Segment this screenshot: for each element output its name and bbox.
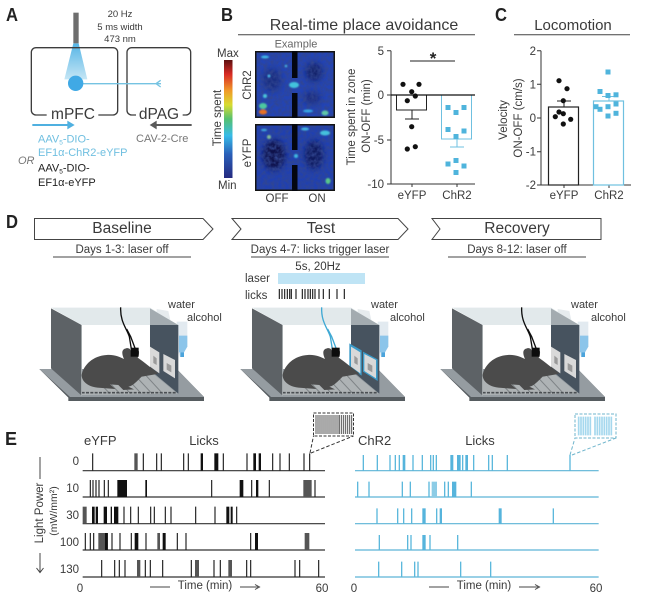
time axes: 0 (351, 583, 357, 595)
color scale: Time spent (212, 89, 224, 146)
raster headings: ChR2 (358, 433, 391, 448)
time axes: 60 (590, 583, 602, 595)
virus labels: 5 (59, 168, 63, 176)
bar chart: velocity: ChR2 (594, 190, 624, 202)
bar chart: time spent in zone: -5 (374, 135, 384, 147)
water and alcohol labels: alcohol (591, 312, 626, 324)
virus labels: -DIO- (63, 134, 90, 146)
panel letter D: D (6, 212, 18, 232)
light power axis: (mW/mm²) (48, 486, 60, 536)
light power axis (34, 456, 79, 576)
bar chart: velocity: -2 (526, 180, 536, 192)
bar chart: velocity: 1 (530, 80, 536, 92)
laser parameters: 473 nm (104, 34, 136, 45)
time axes (77, 580, 602, 595)
light power axis: 0 (73, 456, 79, 468)
region labels (51, 106, 179, 123)
raster: eYFP licks (83, 453, 325, 577)
virus labels: AAV (38, 134, 59, 146)
raster: ChR2 licks (355, 455, 599, 577)
bar chart: velocity: eYFP (550, 190, 579, 202)
light power axis: 100 (60, 537, 79, 549)
raster headings: Licks (465, 433, 495, 448)
inset: ChR2 lick zoom (570, 414, 616, 455)
water and alcohol labels (167, 299, 626, 324)
water and alcohol labels: alcohol (390, 312, 425, 324)
virus labels (18, 133, 188, 189)
light power axis: 30 (66, 510, 79, 522)
stage: test (232, 218, 408, 257)
heat map labels: OFF (266, 193, 288, 205)
bar chart: time spent in zone: ChR2 (442, 190, 472, 202)
heat map labels (242, 70, 326, 205)
panel D: behavioral protocol (6, 212, 626, 401)
stage: recovery (432, 218, 601, 257)
chamber: baseline (39, 307, 204, 401)
bar chart: time spent in zone: * (430, 49, 437, 68)
heat map: ChR2 (255, 51, 335, 118)
chamber: recovery (440, 307, 605, 401)
panel letter E: E (5, 429, 17, 449)
stage: baseline: Days 1-3: laser off (75, 244, 169, 256)
diagram: brain regions and optical fiber (31, 13, 192, 129)
raster headings: eYFP (84, 433, 117, 448)
bar chart: velocity: Velocity (498, 100, 510, 140)
inset: eYFP lick zoom (310, 413, 354, 453)
heat map: eYFP (255, 124, 335, 191)
laser parameters: 5 ms width (97, 22, 143, 33)
stage: recovery: Days 8-12: laser off (467, 244, 568, 256)
virus labels: AAV (38, 162, 59, 174)
panel B: real-time place avoidance (212, 5, 475, 205)
panel A: optogenetic circuit diagram (6, 5, 192, 189)
virus labels: OR (18, 155, 35, 167)
raster headings: Licks (189, 433, 219, 448)
stage: baseline: Baseline (92, 220, 152, 237)
bar chart: time spent in zone (346, 46, 475, 202)
laser and licks trace: laser (245, 273, 270, 285)
color scale (212, 48, 239, 192)
laser and licks trace (245, 261, 365, 302)
bar chart: velocity: ON-OFF (cm/s) (513, 78, 525, 158)
stage: recovery: Recovery (484, 220, 550, 237)
stage: test: Test (307, 220, 336, 237)
region labels: mPFC (51, 106, 95, 123)
laser and licks trace: licks (245, 290, 268, 302)
bar chart: time spent in zone: ON-OFF (min) (361, 79, 373, 153)
bar chart: velocity: 0 (530, 113, 536, 125)
stage: test: Days 4-7: licks trigger laser (251, 244, 390, 256)
bar chart: time spent in zone: Time spent in zone (346, 69, 358, 165)
bar chart: time spent in zone: eYFP (398, 190, 427, 202)
virus labels: 5 (59, 140, 63, 146)
heading B: Real-time place avoidance (270, 17, 458, 34)
raster headings (84, 433, 495, 448)
color scale: Max (217, 48, 239, 60)
bar chart: time spent in zone: -10 (367, 179, 384, 191)
example label: Example (275, 38, 317, 50)
bar chart: time spent in zone: 0 (378, 90, 384, 102)
water and alcohol labels: water (167, 299, 195, 311)
stage: baseline (34, 218, 213, 257)
heat map labels: ON (308, 193, 326, 205)
heading C: Locomotion (534, 17, 612, 34)
virus labels: EF1α-eYFP (38, 177, 96, 189)
water and alcohol labels: water (370, 299, 398, 311)
time axes: 60 (316, 583, 328, 595)
virus labels: -DIO- (63, 162, 90, 174)
laser and licks trace: 5s, 20Hz (295, 261, 341, 273)
time axes: Time (min) (178, 580, 232, 592)
water and alcohol labels: water (570, 299, 598, 311)
virus labels: EF1α-ChR2-eYFP (38, 147, 128, 159)
panel E: lick rasters (5, 413, 616, 595)
panel letter A: A (6, 5, 18, 25)
bar chart: velocity (498, 46, 631, 202)
light power axis: Light Power (34, 482, 46, 543)
laser parameters (97, 9, 143, 45)
panel letter C: C (495, 5, 507, 25)
water and alcohol labels: alcohol (187, 312, 222, 324)
light power axis: 130 (60, 564, 79, 576)
region labels: dPAG (139, 106, 179, 123)
time axes: Time (min) (457, 580, 511, 592)
color scale: Min (218, 180, 237, 192)
bar chart: velocity: -1 (526, 147, 536, 159)
laser parameters: 20 Hz (108, 9, 133, 20)
virus labels: CAV-2-Cre (136, 133, 188, 145)
bar chart: time spent in zone: 5 (378, 46, 384, 58)
light power axis: 10 (66, 483, 79, 495)
panel C: locomotion (495, 5, 631, 202)
time axes: 0 (77, 583, 83, 595)
heat map labels: ChR2 (242, 70, 254, 100)
panel letter B: B (221, 5, 233, 25)
bar chart: velocity: 2 (530, 46, 536, 58)
heat map labels: eYFP (242, 138, 254, 167)
chamber: test with laser on (240, 307, 405, 401)
